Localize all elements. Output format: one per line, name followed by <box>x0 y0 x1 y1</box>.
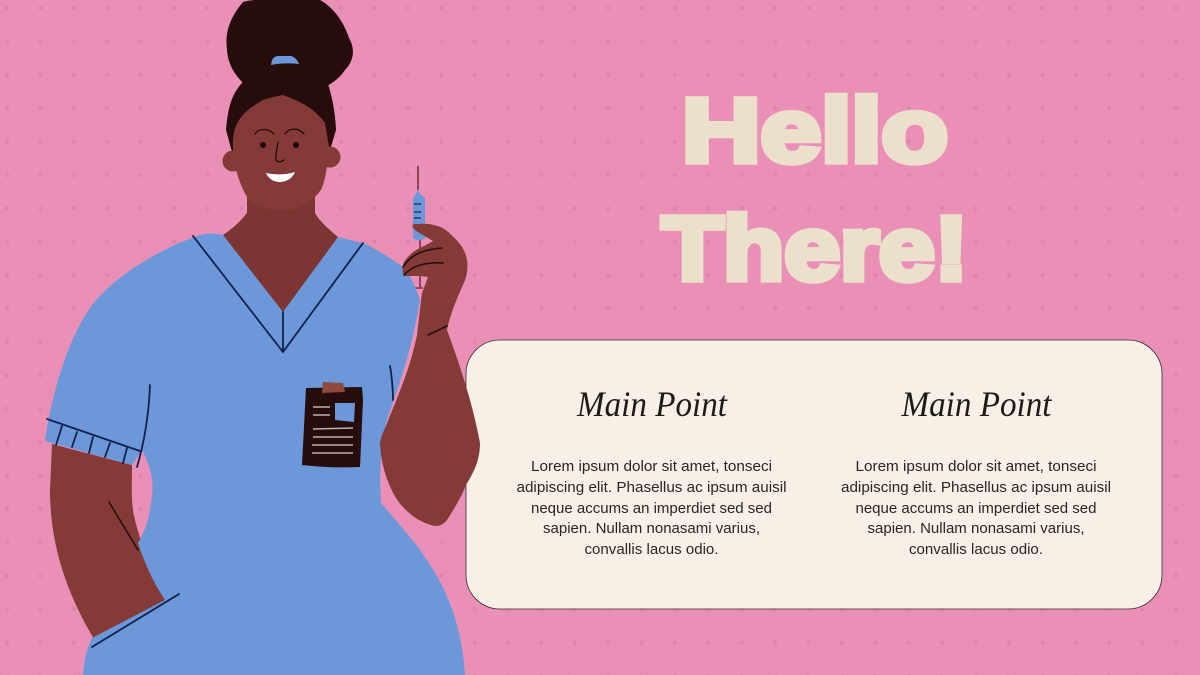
title <box>662 82 968 300</box>
heading: left main point: Main Point <box>576 384 728 424</box>
text block: right body: neque accums an imperdiet sed sed <box>856 501 1096 517</box>
title: There! <box>662 200 968 300</box>
text block: left body <box>516 459 786 558</box>
icon: syringe <box>412 166 425 288</box>
icon: id badge clipboard <box>302 382 363 467</box>
icon: scrubs top <box>45 234 465 675</box>
text block: left body: sapien. Nullam nonasami varius, <box>543 521 760 537</box>
icon: right arm and hand <box>380 224 480 526</box>
icon: scrubs outlines <box>47 236 393 647</box>
column: left main point <box>516 384 786 558</box>
icon: ears <box>222 146 340 172</box>
illustration: nurse with syringe <box>45 0 480 675</box>
title: Hello <box>682 82 948 182</box>
text block: left body: convallis lacus odio. <box>584 542 718 558</box>
icon: hair bun <box>226 0 353 88</box>
text block: right body <box>841 459 1111 558</box>
text block: right body: convallis lacus odio. <box>909 542 1043 558</box>
text block: left body: neque accums an imperdiet sed sed <box>531 501 772 517</box>
text block: left body: Lorem ipsum dolor sit amet, tonseci <box>531 459 772 475</box>
icon: left arm <box>50 444 167 644</box>
icon: face <box>233 95 329 211</box>
text block: right body: sapien. Nullam nonasami varius, <box>868 521 1084 537</box>
icon: facial features <box>255 129 304 182</box>
icon: skin crease lines <box>109 248 447 550</box>
icon: lower hair <box>226 82 336 152</box>
icon: hair band <box>271 56 299 65</box>
text block: right body: adipiscing elit. Phasellus ac ipsum auisil <box>841 480 1111 496</box>
text block: right body: Lorem ipsum dolor sit amet, tonseci <box>856 459 1096 475</box>
column: right main point <box>841 384 1111 558</box>
text block: left body: adipiscing elit. Phasellus ac ipsum auisil <box>516 480 786 496</box>
icon: neck <box>223 190 338 314</box>
heading: right main point: Main Point <box>901 384 1052 424</box>
panel: main points card <box>466 340 1162 609</box>
